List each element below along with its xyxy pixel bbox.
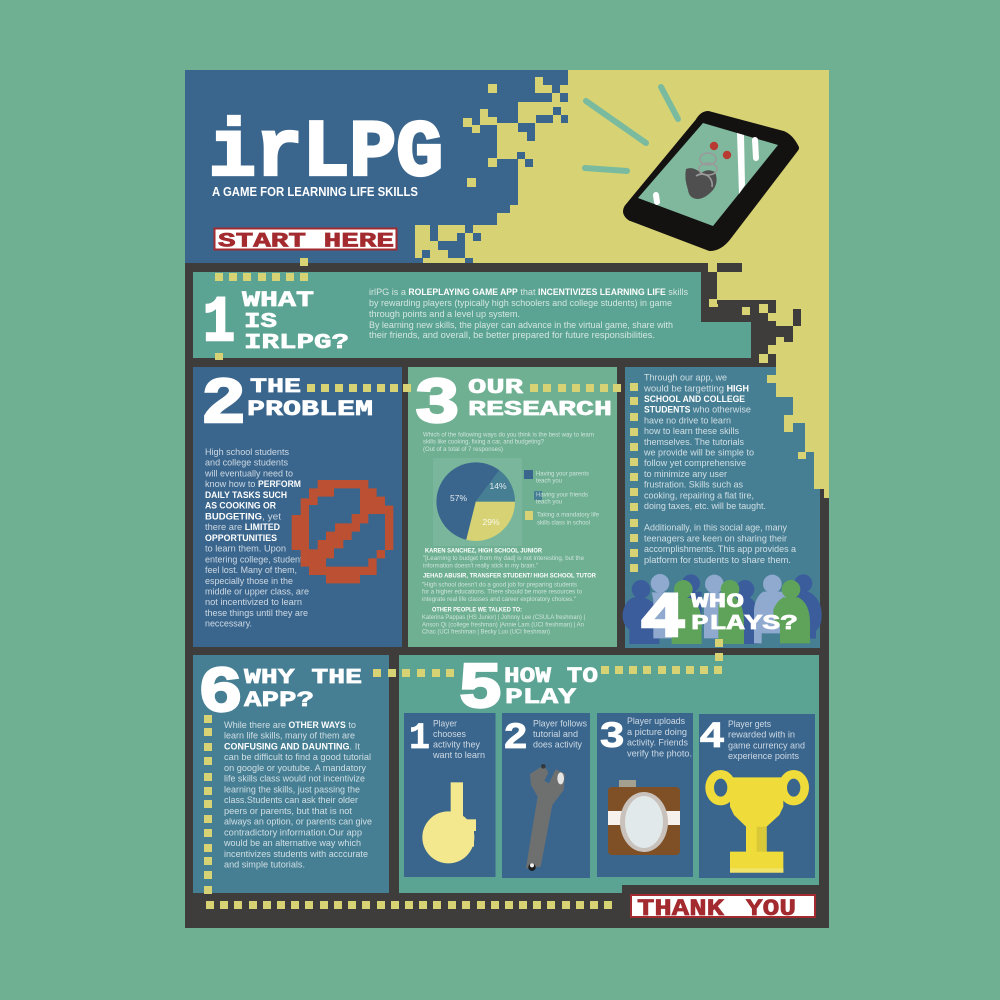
- heading: PROBLEM: [247, 397, 373, 422]
- audience text: STUDENTS who otherwise: [644, 405, 751, 415]
- why text: incentivizes students with acccurate: [224, 849, 368, 859]
- problem text: not incentivized to learn: [205, 597, 302, 607]
- chart legend: Having your parents: [536, 470, 590, 477]
- problem text: AS COOKING OR: [205, 501, 277, 511]
- step 3 card: verify the photo.: [627, 748, 692, 758]
- icon: phone with glowing rays: [585, 87, 795, 247]
- audience text: platform for students to share them.: [644, 555, 791, 565]
- step 2 card: [502, 713, 590, 878]
- icon: pointing hand: [422, 782, 476, 863]
- panel: how to play: [399, 653, 819, 893]
- panel: the problem: [193, 367, 402, 647]
- problem text: [204, 447, 309, 629]
- step 1 card: Player: [433, 718, 457, 728]
- why text: learning the skills, just passing the: [224, 784, 360, 794]
- step 1 card: want to learn: [432, 750, 485, 760]
- audience text: Through our app, we: [644, 373, 727, 383]
- why text: always an option, or parents can give: [224, 817, 372, 827]
- title: irLPG: [209, 108, 443, 200]
- problem text: middle or upper class, are: [205, 586, 309, 596]
- chart legend: teach you: [536, 477, 562, 484]
- audience text: accomplishments. This app provides a: [644, 544, 797, 554]
- problem text: entering college, students: [205, 554, 307, 564]
- description text: [369, 287, 688, 340]
- audience text: teenagers are keen on sharing their: [644, 533, 787, 543]
- description text: their friends, and overall, be better prepared for future responsibilities.: [369, 330, 655, 340]
- why text: peers or parents, but that is not: [224, 806, 352, 816]
- step 4 card: experience points: [728, 751, 799, 761]
- chart legend: [524, 470, 599, 526]
- heading: [242, 288, 349, 355]
- panel: what is irlpg: [193, 272, 751, 360]
- heading: [691, 591, 798, 636]
- interview quotes: "High school doesn't do a good job for preparing students: [422, 582, 578, 588]
- step 2 card: Player follows: [533, 718, 587, 728]
- step 4 card: Player gets: [728, 719, 771, 729]
- problem text: know how to PERFORM: [205, 479, 301, 489]
- icon: camera: [608, 780, 680, 855]
- heading: [504, 664, 598, 710]
- panel: who plays: [623, 367, 822, 656]
- why text: While there are OTHER WAYS to: [224, 720, 356, 730]
- audience text: have no drive to learn: [644, 415, 731, 425]
- description text: irlPG is a ROLEPLAYING GAME APP that INCENTIVIZES LEARNING LIFE skills: [369, 287, 688, 297]
- heading: PLAY: [505, 685, 577, 710]
- start here button: [214, 228, 396, 254]
- problem text: High school students: [205, 447, 289, 457]
- interview quotes: for a higher educations. There should be more resources to: [422, 589, 582, 596]
- problem text: neccessary.: [205, 619, 252, 629]
- step 3 card: Player uploads: [627, 716, 685, 726]
- heading: THE: [250, 376, 301, 399]
- problem text: especially those in the: [205, 576, 293, 586]
- number 4: 4: [640, 584, 686, 656]
- heading: RESEARCH: [468, 399, 612, 422]
- step 2 card: tutorial and: [533, 729, 578, 739]
- thank you button: THANK: [637, 896, 724, 922]
- interview quotes: Anson Qi (college freshman) |Annie Lam (UCI freshman) | An: [422, 622, 584, 628]
- why text: class.Students can ask their older: [224, 795, 358, 805]
- pie chart: 57%: [450, 493, 467, 503]
- icon: pixel no sign: [292, 480, 393, 583]
- why text: life skills class would not incentivize: [224, 774, 365, 784]
- number 5: 5: [458, 653, 503, 727]
- panel: why the app: [193, 655, 389, 893]
- step 1 card: chooses: [433, 729, 466, 739]
- survey question: skills like cooking, fixing a car, and budgeting?: [423, 439, 544, 446]
- step 3 card: [597, 713, 693, 877]
- problem text: these things until they are: [205, 608, 308, 618]
- interview quotes: Katerina Pappas (HS Junior) | Johnny Lee (CSULA freshman) |: [422, 614, 585, 621]
- step 3 card: a picture doing: [627, 727, 687, 737]
- audience text: Additionally, in this social age, many: [644, 523, 787, 533]
- thank you button: [631, 895, 815, 922]
- chart legend: skills class in school: [537, 519, 590, 526]
- start here button: START HERE: [218, 230, 394, 254]
- audience text: doing taxes, etc. will be taught.: [644, 501, 766, 511]
- chart legend: Taking a mandatory life: [537, 511, 599, 518]
- step 1 card: activity they: [433, 740, 480, 750]
- heading: WHY THE: [244, 667, 362, 690]
- number 2: 2: [201, 368, 246, 442]
- heading: IRLPG?: [244, 332, 349, 355]
- problem text: to learn them. Upon: [205, 544, 286, 554]
- interview quotes: Chac (UCI freshman | Becky Luo (UCI freshman): [422, 628, 550, 636]
- chart legend: teach you: [536, 498, 562, 505]
- heading: [244, 667, 362, 713]
- audience text: [643, 373, 797, 565]
- survey question: Which of the following ways do you think is the best way to learn: [423, 432, 594, 438]
- number 6: 6: [198, 657, 243, 731]
- step 2 card: does activity: [533, 740, 582, 750]
- audience text: how to learn these skills: [644, 426, 739, 436]
- audience text: we provide will be simple to: [643, 448, 754, 458]
- heading: APP?: [244, 688, 314, 713]
- interview quotes: integrate real life classes and career exploratory choices.": [422, 596, 577, 603]
- step 1 card: [404, 713, 496, 877]
- thank you button: YOU: [746, 896, 796, 922]
- heading: [468, 377, 612, 422]
- problem text: will eventually need to: [204, 468, 293, 478]
- why text: would be an alternative way which: [223, 838, 361, 848]
- step 3 card: 3: [599, 717, 625, 759]
- heading: HOW TO: [504, 664, 598, 689]
- interview quotes: "[Learning to budget from my dad] is not interesting, but the: [423, 555, 584, 562]
- audience text: would be targetting HIGH: [643, 383, 749, 393]
- why text: CONFUSING AND DAUNTING . It: [224, 742, 360, 752]
- interview quotes: [422, 548, 597, 636]
- survey question: [423, 432, 594, 453]
- problem text: there are LIMITED: [205, 522, 280, 532]
- yellow pixels over who plays panel: [767, 360, 829, 498]
- problem text: OPPORTUNITIES: [205, 533, 277, 543]
- subtitle: A GAME FOR LEARNING LIFE SKILLS: [212, 185, 418, 199]
- audience text: follow yet comprehensive: [644, 458, 746, 468]
- description text: through points and a level up system.: [369, 309, 520, 319]
- chart legend: Having your friends: [536, 491, 589, 498]
- why text: on google or youtube. A mandatory: [224, 763, 366, 773]
- number 1: 1: [203, 288, 235, 360]
- interview quotes: JEHAD ABUSIR, TRANSFER STUDENT/ HIGH SCHOOL TUTOR: [423, 574, 597, 580]
- problem text: and college students: [205, 458, 288, 468]
- description text: by rewarding players (typically high schoolers and college students) in game: [369, 298, 672, 308]
- heading: IS: [244, 311, 277, 334]
- interview quotes: OTHER PEOPLE WE TALKED TO:: [432, 608, 522, 614]
- pie chart: 29%: [482, 517, 500, 527]
- why text: and simple tutorials.: [224, 860, 305, 870]
- pie chart: [433, 458, 522, 546]
- heading: [247, 376, 373, 422]
- panel: hero header: [185, 70, 829, 270]
- step 4 card: 4: [699, 717, 725, 759]
- audience text: frustration. Skills such as: [644, 480, 743, 490]
- description text: By learning new skills, the player can advance in the virtual game, share with: [369, 320, 673, 330]
- audience text: SCHOOL AND COLLEGE: [644, 394, 745, 404]
- step 1 card: 1: [409, 718, 430, 760]
- pie chart: 14%: [489, 481, 507, 491]
- step 4 card: [699, 714, 815, 878]
- number 3: 3: [414, 368, 460, 442]
- step 3 card: activity. Friends: [627, 738, 688, 748]
- step 4 card: rewarded with in: [728, 730, 795, 740]
- audience text: cooking, repairing a flat tire,: [644, 490, 754, 500]
- icon: crowd of people: [623, 574, 822, 644]
- step 2 card: 2: [503, 718, 528, 760]
- why text: can be difficult to find a good tutorial: [224, 752, 371, 762]
- heading: WHO: [691, 591, 744, 614]
- interview quotes: information doesn't really stick in my brain.": [423, 562, 539, 570]
- interview quotes: KAREN SANCHEZ, HIGH SCHOOL JUNIOR: [425, 548, 543, 554]
- why text: contradictory information.Our app: [224, 827, 362, 837]
- audience text: themselves. The tutorials: [644, 437, 744, 447]
- step 4 card: game currency and: [728, 740, 805, 750]
- why text: learn life skills, many of them are: [224, 731, 355, 741]
- dark frame: [185, 263, 829, 928]
- problem text: BUDGETING , yet: [205, 511, 281, 521]
- heading: WHAT: [242, 288, 314, 313]
- survey question: (Out of a total of 7 responses): [423, 446, 503, 453]
- why text: [223, 720, 372, 870]
- heading: OUR: [468, 377, 524, 400]
- problem text: DAILY TASKS SUCH: [205, 490, 287, 500]
- icon: trophy: [710, 774, 805, 873]
- panel: our research: [408, 367, 617, 647]
- audience text: to minimize any user: [644, 469, 727, 479]
- dotted path: [204, 258, 767, 909]
- icon: wrench: [526, 764, 565, 871]
- heading: PLAYS?: [691, 613, 798, 636]
- problem text: feel lost. Many of them,: [205, 565, 297, 575]
